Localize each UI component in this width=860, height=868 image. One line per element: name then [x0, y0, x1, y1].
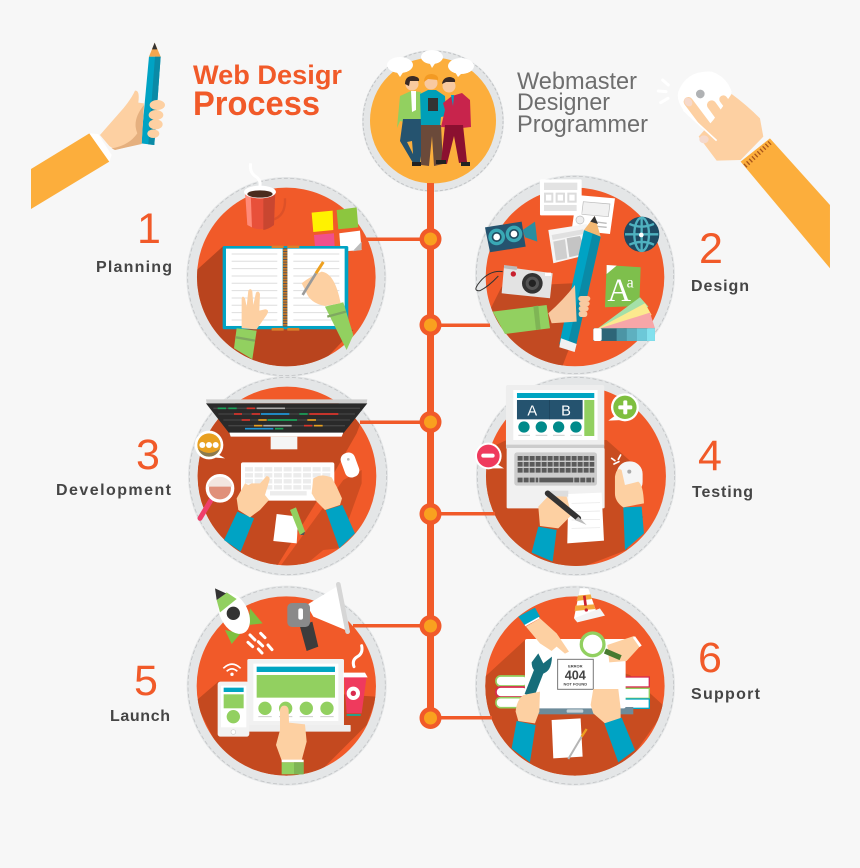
number 2: 2: [699, 225, 723, 273]
label: Design: Design: [691, 278, 749, 295]
panel: step 3 development: [56, 376, 388, 576]
panel: step 2 design: [475, 175, 749, 375]
illustration: laptop with A/B test: A: [527, 403, 537, 419]
illustration: notebook and hands: [186, 163, 386, 377]
panel: step 1 planning: [96, 163, 386, 377]
illustration: design tools and pencil: [475, 175, 675, 375]
title: Web Desigr: [193, 60, 342, 90]
illustration: laptop with A/B test: [475, 376, 676, 576]
illustration: launching website: [187, 584, 387, 786]
illustration: laptop with A/B test: B: [561, 403, 571, 419]
panel: step 5 launch: [110, 584, 387, 786]
label: Development: Development: [56, 482, 172, 499]
label: Support: Support: [691, 686, 761, 703]
illustration: fixing 404 page: 404: [565, 669, 586, 683]
illustration: fixing 404 page: NOT FOUND: [563, 681, 587, 686]
number 3: 3: [136, 431, 160, 479]
illustration: desktop and keyboard: [188, 376, 388, 576]
team roles: Webmaster: [517, 68, 637, 95]
label: Planning: Planning: [96, 259, 172, 276]
right hand on mouse: [658, 72, 830, 268]
team roles: [517, 68, 648, 138]
team roles: Programmer: [517, 111, 648, 138]
title: [193, 60, 342, 123]
number 4: 4: [698, 432, 722, 480]
title: Process: [193, 85, 320, 123]
illustration: design tools and pencil: A: [607, 273, 631, 309]
team circle: [362, 50, 504, 192]
illustration: fixing 404 page: ERROR: [568, 664, 583, 669]
illustration: design tools and pencil: a: [627, 275, 634, 292]
panel: step 6 support: [475, 586, 761, 786]
panel: step 4 testing: [475, 376, 753, 576]
illustration: fixing 404 page: [475, 586, 675, 786]
number 1: 1: [137, 205, 161, 253]
number 5: 5: [134, 657, 158, 705]
vertical timeline with connectors: [353, 183, 495, 729]
team roles: Designer: [517, 89, 610, 116]
left hand holding pencil: [31, 43, 165, 209]
label: Testing: Testing: [692, 484, 753, 501]
number 6: 6: [698, 634, 722, 682]
label: Launch: Launch: [110, 708, 170, 725]
infographic: [31, 42, 830, 786]
